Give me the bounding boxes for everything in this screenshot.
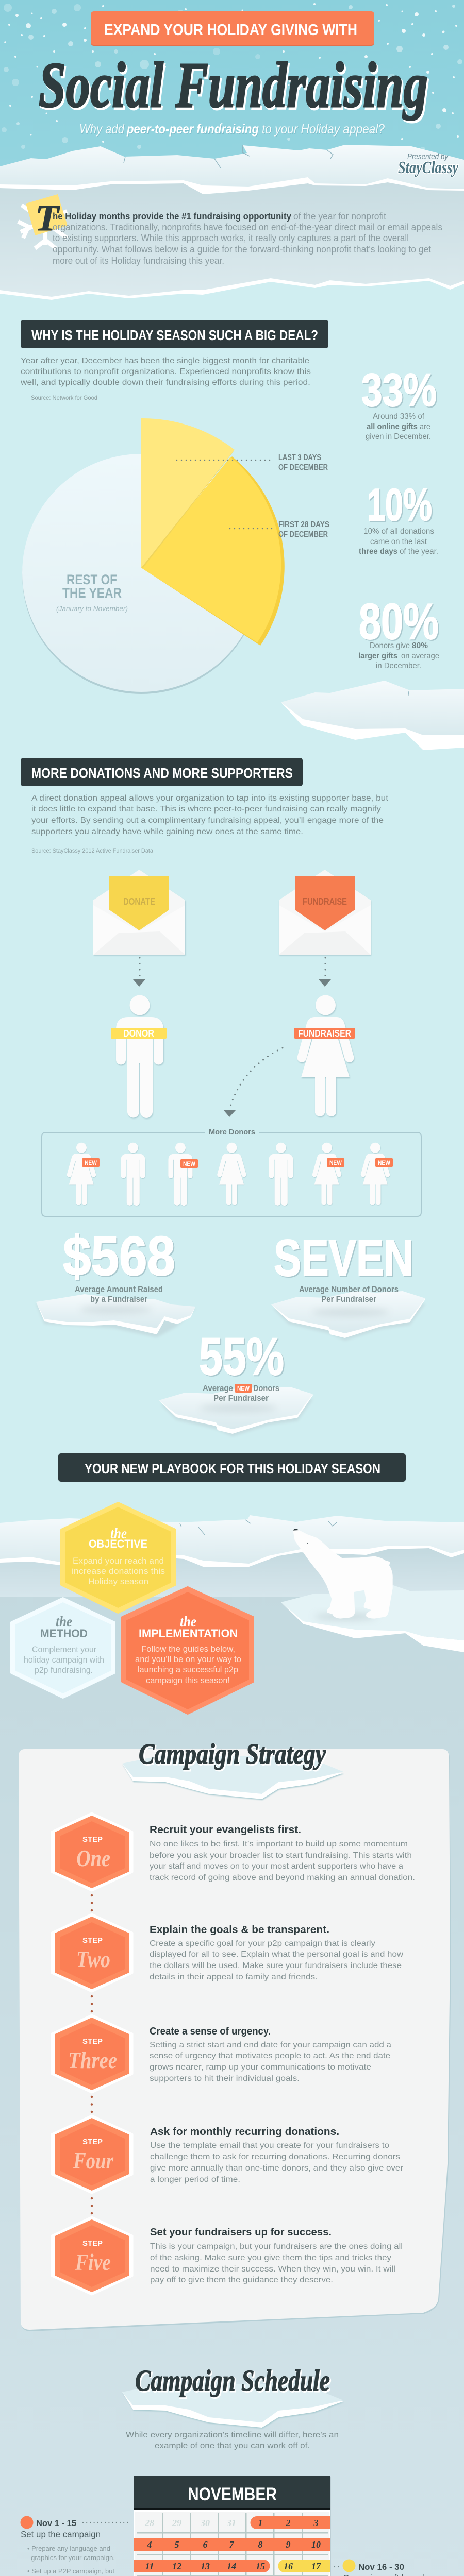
pie chart: share of giving: FIRST 28 DAYS <box>278 520 329 529</box>
arrow: fundraiser to more donors <box>223 1048 283 1117</box>
callout: nov 1-15 <box>21 2516 128 2576</box>
stat: 10% <box>359 479 438 556</box>
callout: nov 1-15: Set up the campaign <box>21 2529 101 2539</box>
stat: 55% on floe <box>159 1327 313 1436</box>
stat: 80%: larger gifts <box>358 652 397 660</box>
figure: fundraiser <box>294 995 355 1116</box>
paragraph: peer to peer appeal: your efforts. By sending out a complimentary fundraising appeal, you’ll engage more of the <box>31 816 384 825</box>
november dates: 13 <box>201 2561 210 2571</box>
hexagon: the method: p2p fundraising. <box>35 1665 93 1675</box>
polar bear on floe <box>281 1529 464 1652</box>
heading: more donations and more supporters: MORE DONATIONS AND MORE SUPPORTERS <box>31 765 293 781</box>
step two text <box>150 1924 403 1981</box>
step two text: Create a specific goal for your p2p campaign that is clearly <box>150 1939 375 1948</box>
step three text: Create a sense of urgency. <box>150 2026 271 2037</box>
subtitle: to your Holiday appeal? <box>262 121 385 137</box>
top ice shelf <box>0 145 464 309</box>
heading: campaign schedule on floe: Campaign Schedule <box>135 2364 330 2397</box>
hexagon badge: step one: One <box>76 1845 110 1871</box>
november dates: 2 <box>286 2518 291 2528</box>
hexagon badge: step one: STEP <box>82 1835 103 1844</box>
hexagon badge: step five: Five <box>75 2249 111 2275</box>
november dates: 29 <box>172 2518 181 2528</box>
hexagon badge: step two: STEP <box>82 1936 103 1945</box>
callout: nov 1-15: graphics for your campaign. <box>31 2554 115 2562</box>
hexagon: the implementation: launching a successful p2p <box>138 1665 238 1674</box>
title banner: EXPAND YOUR HOLIDAY GIVING WITH <box>104 21 357 39</box>
drop cap: snowflake and yellow T card: T <box>35 197 60 239</box>
arrow: envelope to fundraiser <box>319 958 331 987</box>
panel: more donors <box>42 1128 421 1216</box>
hexagon badge: step three: STEP <box>82 2037 103 2046</box>
subtitle: peer-to-peer fundraising <box>126 121 259 137</box>
title banner <box>91 11 374 46</box>
paragraph: december giving: Source: Network for Good <box>31 394 97 401</box>
step four text: challenge them to ask for recurring donations. Recurring donors <box>150 2153 400 2161</box>
heading: why is the holiday season such a big deal <box>21 320 328 348</box>
stat: 33% <box>361 365 437 441</box>
hexagon: the implementation: and you’ll be on your way to <box>135 1654 241 1664</box>
paragraph: peer to peer appeal: Source: StayClassy 2012 Active Fundraiser Data <box>31 847 153 854</box>
step one text: your staff and moves on to your most ardent supporters who have a <box>150 1862 403 1871</box>
hexagon: the method: holiday campaign with <box>24 1655 104 1665</box>
figure: donor: DONOR <box>123 1028 154 1039</box>
pie chart: share of giving: (January to November) <box>56 604 128 613</box>
step two text: the dollars will be used. Make sure your fundraisers include these <box>150 1961 402 1970</box>
november dates: 15 <box>256 2561 265 2571</box>
step one text: Recruit your evangelists first. <box>150 1824 301 1836</box>
paragraph: december giving: Year after year, December has been the single biggest month for charitable <box>21 357 309 365</box>
step two <box>52 1914 403 1991</box>
hexagon: the implementation: IMPLEMENTATION <box>139 1627 238 1640</box>
schedule intro text <box>126 2431 339 2450</box>
paragraph: peer to peer appeal: it does little to expand that base. This is where peer-to-peer fundraising can really magnify <box>31 805 381 814</box>
schedule bars <box>134 2516 330 2576</box>
hexagon badge: step four <box>52 2116 132 2193</box>
step three text: grows nearer, ramp up your communications to motivate <box>150 2063 371 2072</box>
stat: 55% on floe: NEW <box>237 1385 250 1392</box>
pie chart: share of giving: REST OF <box>67 572 117 587</box>
step one text <box>150 1824 415 1882</box>
calendar: november <box>134 2476 331 2576</box>
stat: 10%: 10% <box>367 479 432 530</box>
heading: campaign strategy on floe: Campaign Strategy <box>139 1738 326 1770</box>
hexagon: the method: Complement your <box>32 1645 96 1654</box>
november dates: 14 <box>227 2561 236 2571</box>
intro text block: more out of its Holiday fundraising this year. <box>53 256 224 266</box>
step four text: Use the template email that you create for your fundraisers to <box>150 2141 389 2150</box>
stat: 33%: 33% <box>361 365 437 416</box>
stat: 33%: given in December. <box>366 432 431 441</box>
heading: your new playbook: YOUR NEW PLAYBOOK FOR THIS HOLIDAY SEASON <box>85 1461 380 1477</box>
stat: 80%: 80% <box>359 593 439 650</box>
step one text: No one likes to be first. It’s important to build up some momentum <box>150 1840 408 1849</box>
intro text block: he Holiday months provide the #1 fundraising opportunity <box>53 211 291 222</box>
callout: nov 16-30 <box>335 2560 441 2576</box>
stat: 80%: on average <box>401 652 439 660</box>
step five text: This is your campaign, but your fundraisers are the ones doing all <box>150 2242 403 2251</box>
stat: 55% on floe: Average <box>203 1384 233 1393</box>
stat: 80%: in December. <box>376 662 421 670</box>
connector dots: three to four <box>91 2097 93 2113</box>
icon: polar bear <box>293 1529 393 1619</box>
hexagon: the method: the <box>56 1613 72 1630</box>
stat: 80%: Donors give <box>370 641 410 650</box>
stat: 33%: all online gifts <box>367 422 418 431</box>
stat: 55% on floe: 55% <box>199 1327 284 1386</box>
step four text: Ask for monthly recurring donations. <box>150 2126 339 2138</box>
ice shelf and lower page background <box>0 1515 464 2576</box>
presented by StayClassy logo: Presented by <box>407 152 449 161</box>
step one text: track record of going above and beyond making an annual donation. <box>150 1873 415 1882</box>
november dates: 7 <box>229 2539 234 2550</box>
step five text: pay off to give them the guidance they deserve. <box>150 2276 333 2284</box>
stat: 80% <box>358 593 439 670</box>
november dates: 11 <box>145 2561 154 2571</box>
pie chart: share of giving: OF DECEMBER <box>278 463 328 472</box>
paragraph: december giving: contributions to nonprofit organizations. Experienced nonprofits know this <box>21 367 311 376</box>
stat: 10%: came on the last <box>370 537 427 546</box>
callout: nov 1-15: • Prepare any language and <box>27 2545 110 2552</box>
hexagon badge: step three: Three <box>68 2047 117 2073</box>
envelope: donate: DONATE <box>123 896 155 907</box>
intro text block: opportunity. What follows below is a guide for the forward-thinking nonprofit that’s looking to get <box>53 244 431 255</box>
pie chart: share of giving: LAST 3 DAYS <box>278 453 321 462</box>
hexagon: the method <box>11 1598 114 1698</box>
callout: nov 16-30: Nov 16 - 30 <box>358 2562 404 2572</box>
hexagon badge: step three <box>52 2015 132 2092</box>
step three text: supporters to hit their individual goals. <box>150 2074 300 2083</box>
november dates: 12 <box>172 2561 181 2571</box>
intro text block: to existing supporters. While this approach works, it really only captures a part of the overall <box>53 233 409 243</box>
stat: $568 on floe <box>36 1225 195 1337</box>
november dates: 30 <box>200 2518 210 2528</box>
november dates: 3 <box>313 2518 319 2528</box>
step five text: need to maximize their success. When they win, you win. It will <box>150 2265 395 2274</box>
stat: $568 on floe: Average Amount Raised <box>75 1285 163 1294</box>
calendar header <box>134 2476 330 2510</box>
envelope: fundraise: FUNDRAISE <box>303 896 347 907</box>
step four text: a longer period of time. <box>150 2175 240 2184</box>
hexagon: the objective: Expand your reach and <box>73 1556 164 1566</box>
hexagon badge: step two <box>52 1914 132 1991</box>
calendar header: NOVEMBER <box>188 2484 277 2504</box>
panel: campaign strategy paper <box>19 1749 451 2331</box>
stat: $568 on floe: by a Fundraiser <box>90 1295 148 1304</box>
intro text block: of the year for nonprofit <box>293 211 386 222</box>
stat: $568 on floe: $568 <box>63 1225 175 1287</box>
step three text: sense of urgency that motivates people to act. As the end date <box>150 2052 390 2060</box>
stat: seven on floe <box>271 1229 425 1341</box>
step three <box>52 2015 391 2092</box>
panel: more donors: NEW <box>378 1159 391 1166</box>
paragraph: peer to peer appeal: supporters you already have while gaining new ones at the same time. <box>31 827 303 836</box>
intro text block: organizations. Traditionally, nonprofits have focused on end-of-the-year direct mail or email appeals <box>53 222 442 232</box>
intro text block <box>53 211 442 266</box>
heading: campaign strategy on floe: Campaign Strategy <box>140 1739 327 1771</box>
step four text: give more annually than one-time donors, and they also give over <box>150 2164 404 2173</box>
step three text <box>150 2026 391 2083</box>
panel: more donors: More Donors <box>209 1128 255 1137</box>
stat: 55% on floe: Per Fundraiser <box>213 1394 269 1403</box>
heading: your new playbook <box>58 1453 406 1482</box>
november dates: 9 <box>286 2539 291 2550</box>
november dates: 17 <box>311 2561 321 2571</box>
ice floe, right edge <box>281 681 464 750</box>
hexagon badge: step four: Four <box>73 2147 114 2174</box>
heading: campaign schedule on floe <box>122 2364 343 2428</box>
stat: seven on floe: Average Number of Donors <box>299 1285 399 1294</box>
november dates: 1 <box>258 2518 263 2528</box>
envelope: fundraise <box>279 870 371 955</box>
pie chart: share of giving: OF DECEMBER <box>278 530 328 539</box>
stat: 33%: Around 33% of <box>373 412 425 421</box>
step four text <box>150 2126 404 2184</box>
november dates: 8 <box>258 2539 263 2550</box>
heading: why is the holiday season such a big deal: WHY IS THE HOLIDAY SEASON SUCH A BIG DEAL? <box>31 327 318 343</box>
paragraph: peer to peer appeal: A direct donation appeal allows your organization to tap into its existing supporter base, but <box>31 794 389 803</box>
stat: 80%: 80% <box>412 641 428 650</box>
november dates: 16 <box>284 2561 293 2571</box>
connector dots: two to three <box>91 1996 93 2012</box>
panel: more donors: NEW <box>85 1159 97 1166</box>
november dates: 10 <box>311 2539 321 2550</box>
panel: more donors: NEW <box>183 1160 196 1167</box>
stat: 10%: three days <box>359 547 397 556</box>
callout: nov 1-15: Nov 1 - 15 <box>36 2518 76 2528</box>
paragraph: december giving: well, and typically double down their fundraising efforts during this period. <box>20 378 310 387</box>
step five text <box>150 2227 403 2284</box>
envelope: donate <box>93 870 185 955</box>
arrow: envelope to donor <box>133 958 145 987</box>
schedule intro text: example of one that you can work off of. <box>155 2442 310 2450</box>
hexagon: the objective: OBJECTIVE <box>89 1537 147 1550</box>
step four <box>52 2116 404 2193</box>
hexagon badge: step five: STEP <box>82 2239 103 2248</box>
step one <box>52 1814 415 1890</box>
stat: seven on floe: SEVEN <box>274 1229 413 1287</box>
stat: 10%: of the year. <box>400 547 438 556</box>
step three text: Setting a strict start and end date for your campaign can add a <box>150 2041 391 2049</box>
stat: 55% on floe: Donors <box>253 1384 279 1393</box>
step one text: before you ask your broader list to start fundraising. This starts with <box>150 1851 412 1860</box>
hexagon: the objective: Holiday season <box>88 1577 148 1586</box>
subtitle: Why add <box>79 121 125 137</box>
connector dots: one to two <box>91 1895 93 1911</box>
paragraph: peer to peer appeal <box>31 794 389 854</box>
november dates: 5 <box>174 2539 179 2550</box>
stat: 33%: are <box>420 422 430 431</box>
november dates <box>144 2518 321 2576</box>
hexagon badge: step four: STEP <box>82 2138 103 2146</box>
connector dots: four to five <box>91 2198 93 2214</box>
callout: nov 1-15: • Set up a P2P campaign, but <box>27 2568 115 2575</box>
hexagon: the implementation <box>122 1587 253 1714</box>
heading: campaign strategy on floe <box>122 1738 343 1799</box>
stat: seven on floe: Per Fundraiser <box>321 1295 377 1304</box>
step five text: of the asking. Make sure you give them the tips and tricks they <box>150 2253 391 2262</box>
hexagon badge: step one <box>52 1814 132 1890</box>
subtitle <box>79 121 385 137</box>
hexagon: the implementation: the <box>180 1613 196 1630</box>
figure: donor <box>111 995 167 1118</box>
hexagon: the method: METHOD <box>40 1627 88 1640</box>
figure: fundraiser: FUNDRAISER <box>298 1028 351 1039</box>
hexagon: the implementation: campaign this season! <box>146 1675 230 1685</box>
step five text: Set your fundraisers up for success. <box>150 2227 332 2238</box>
step two text: details in their appeal to family and friends. <box>150 1973 318 1981</box>
pie chart: share of giving <box>22 418 329 694</box>
header sky with falling snow <box>0 0 464 191</box>
hexagon: the objective: increase donations this <box>72 1566 165 1576</box>
drop cap: snowflake and yellow T card <box>18 194 68 248</box>
november dates: 31 <box>226 2518 236 2528</box>
hexagon: the objective <box>61 1503 175 1613</box>
step two text: Explain the goals & be transparent. <box>150 1924 329 1936</box>
hexagon badge: step five <box>52 2217 132 2294</box>
pie chart: share of giving: THE YEAR <box>62 585 122 601</box>
panel: more donors: NEW <box>329 1159 342 1166</box>
november dates: 4 <box>146 2539 152 2550</box>
schedule intro text: While every organization's timeline will differ, here's an <box>126 2431 339 2439</box>
step two text: displayed for all to see. Explain what the personal goal is and how <box>150 1950 403 1959</box>
hexagon: the objective: the <box>110 1525 127 1542</box>
november dates: 28 <box>144 2518 154 2528</box>
heading: more donations and more supporters <box>21 758 303 786</box>
november dates: 6 <box>203 2539 207 2550</box>
hexagon: the implementation: Follow the guides below, <box>141 1644 235 1654</box>
hexagon badge: step two: Two <box>76 1946 110 1972</box>
heading: campaign schedule on floe: Campaign Schedule <box>136 2365 331 2398</box>
stat: 10%: 10% of all donations <box>363 527 434 536</box>
paragraph: december giving <box>20 357 311 401</box>
step five <box>52 2217 403 2294</box>
